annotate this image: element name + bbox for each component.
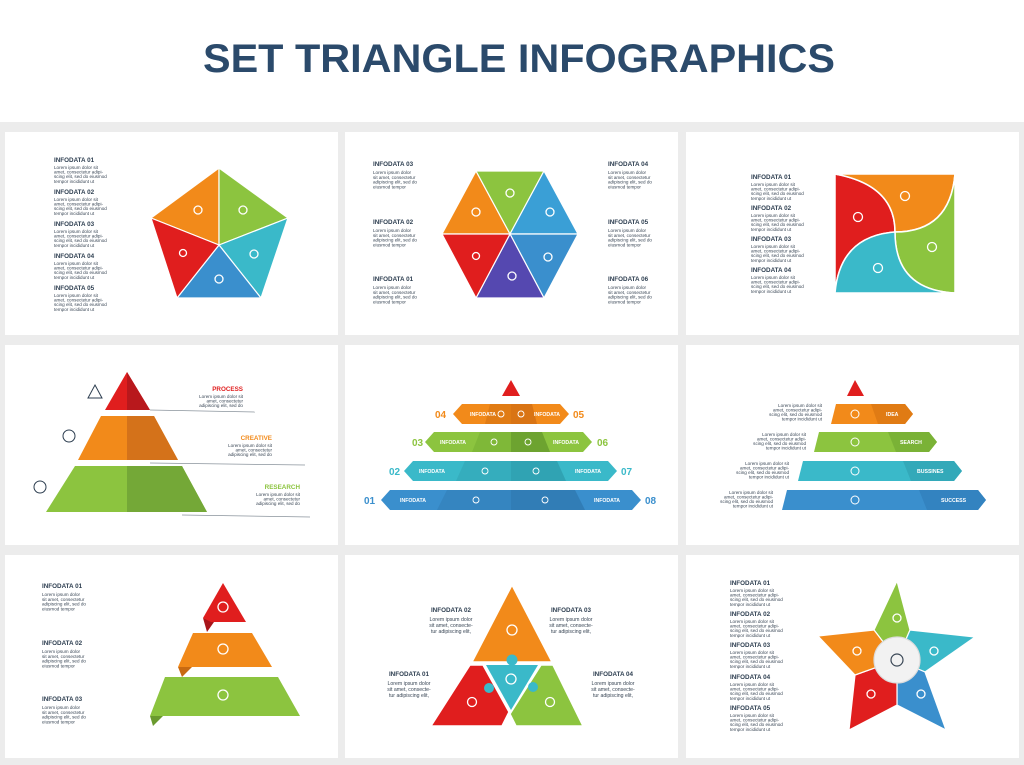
text list: hexagon: INFODATA 06 bbox=[608, 276, 649, 283]
step numbers: 03 bbox=[412, 438, 424, 449]
text list: star: scing elit, sed do eiusmod bbox=[730, 691, 783, 696]
title: SET TRIANGLE INFOGRAPHICS bbox=[203, 37, 835, 81]
text list: pentagon: Lorem ipsum dolor sit bbox=[54, 293, 98, 298]
text list: hexagon: eiusmod tempor bbox=[373, 184, 406, 189]
text list: pentagon: INFODATA 02 bbox=[54, 189, 95, 196]
hexagon chart bbox=[442, 171, 578, 298]
text list: ribbon bbox=[42, 583, 86, 724]
panel: 8-step bar pyramid bbox=[345, 345, 678, 545]
text list: star: INFODATA 02 bbox=[730, 611, 771, 618]
text list: ribbon: INFODATA 01 bbox=[42, 583, 83, 590]
labels: puzzle: INFODATA 02 bbox=[431, 607, 472, 614]
text list: star: INFODATA 04 bbox=[730, 674, 771, 681]
arrow bars bbox=[782, 404, 986, 510]
panel: star bbox=[686, 555, 1019, 758]
text list: star: tempor incididunt ut bbox=[730, 633, 771, 638]
text list: star: amet, consectetur adipi- bbox=[730, 687, 779, 692]
text list: pentagon: tempor incididunt ut bbox=[54, 275, 95, 280]
text list: star: tempor incididunt ut bbox=[730, 602, 771, 607]
step numbers: 04 bbox=[435, 410, 447, 421]
text list: ribbon: eiusmod tempor bbox=[42, 719, 75, 724]
panel: pentagon bbox=[5, 132, 338, 335]
labels: pyramid: RESEARCH bbox=[265, 484, 300, 491]
side text: Lorem ipsum dolor sit bbox=[729, 490, 773, 495]
text list: square: Lorem ipsum dolor sit bbox=[751, 275, 795, 280]
text list: pentagon: tempor incididunt ut bbox=[54, 211, 95, 216]
labels: puzzle: tur adipiscing elit, bbox=[431, 629, 471, 635]
text list: hexagon: Lorem ipsum dolor bbox=[373, 170, 411, 175]
text list: pentagon: scing elit, sed do eiusmod bbox=[54, 206, 107, 211]
text list: pentagon: tempor incididunt ut bbox=[54, 307, 95, 312]
text list: square: Lorem ipsum dolor sit bbox=[751, 213, 795, 218]
bars: INFODATA bbox=[575, 469, 601, 475]
text list: ribbon: Lorem ipsum dolor bbox=[42, 705, 80, 710]
panel: hexagon bbox=[345, 132, 678, 335]
text list: pentagon: scing elit, sed do eiusmod bbox=[54, 238, 107, 243]
text list: pentagon: scing elit, sed do eiusmod bbox=[54, 270, 107, 275]
labels: puzzle: sit amet, consecte- bbox=[591, 687, 635, 693]
labels: puzzle: INFODATA 03 bbox=[551, 607, 592, 614]
step numbers: 01 bbox=[364, 496, 376, 507]
labels: pyramid: adipiscing elit, sed do bbox=[228, 452, 272, 457]
bars bbox=[381, 404, 641, 510]
labels: pyramid: adipiscing elit, sed do bbox=[199, 403, 243, 408]
side text: Lorem ipsum dolor sit bbox=[762, 432, 806, 437]
labels: pyramid: CREATIVE bbox=[241, 435, 272, 442]
text list: pentagon: INFODATA 01 bbox=[54, 157, 95, 164]
text list: pentagon: scing elit, sed do eiusmod bbox=[54, 302, 107, 307]
bars: INFODATA bbox=[534, 412, 560, 418]
side text: amet, consectetur adipi- bbox=[740, 466, 789, 470]
text list: square: Lorem ipsum dolor sit bbox=[751, 182, 795, 187]
text list: pentagon: amet, consectetur adipi- bbox=[54, 298, 103, 303]
text list: square: amet, consectetur adipi- bbox=[751, 280, 800, 285]
text list: hexagon: eiusmod tempor bbox=[608, 242, 641, 247]
text list: hexagon: adipiscing elit, sed do bbox=[608, 238, 652, 243]
text list: hexagon: sit amet, consectetur bbox=[373, 175, 416, 180]
text list: star: scing elit, sed do eiusmod bbox=[730, 659, 783, 664]
side text: amet, consectetur adipi- bbox=[773, 408, 822, 412]
text list: star: Lorem ipsum dolor sit bbox=[730, 713, 774, 718]
text list: hexagon: Lorem ipsum dolor bbox=[608, 285, 646, 290]
text list: pentagon: Lorem ipsum dolor sit bbox=[54, 261, 98, 266]
text list: hexagon: eiusmod tempor bbox=[373, 242, 406, 247]
labels: puzzle: tur adipiscing elit, bbox=[593, 693, 633, 699]
text list: pentagon: Lorem ipsum dolor sit bbox=[54, 165, 98, 170]
text list: square: amet, consectetur adipi- bbox=[751, 249, 800, 254]
labels: puzzle: Lorem ipsum dolor bbox=[592, 681, 634, 687]
arrow bars: BUSSINES bbox=[917, 469, 944, 475]
text list: square: amet, consectetur adipi- bbox=[751, 218, 800, 223]
text list: ribbon: adipiscing elit, sed do bbox=[42, 715, 86, 720]
side text: tempor incididunt ut bbox=[766, 446, 807, 450]
text list: hexagon: INFODATA 05 bbox=[608, 219, 649, 226]
text list: star: amet, consectetur adipi- bbox=[730, 718, 779, 723]
text list: star: tempor incididunt ut bbox=[730, 727, 771, 732]
text list: pentagon: INFODATA 05 bbox=[54, 285, 95, 292]
step numbers: 02 bbox=[389, 467, 401, 478]
puzzle chart bbox=[431, 585, 583, 726]
text list: star: INFODATA 01 bbox=[730, 580, 771, 587]
text list: pentagon: amet, consectetur adipi- bbox=[54, 234, 103, 239]
labels: puzzle: Lorem ipsum dolor bbox=[550, 617, 592, 623]
bars: INFODATA bbox=[594, 498, 620, 504]
text list: star: amet, consectetur adipi- bbox=[730, 655, 779, 660]
labels: pyramid bbox=[199, 386, 301, 506]
text list: hexagon: eiusmod tempor bbox=[373, 299, 406, 304]
bars: INFODATA bbox=[440, 440, 466, 446]
text list: hexagon: INFODATA 01 bbox=[373, 276, 414, 283]
bars: INFODATA bbox=[553, 440, 579, 446]
text list: square: Lorem ipsum dolor sit bbox=[751, 244, 795, 249]
step numbers: 08 bbox=[645, 496, 657, 507]
panel: 3-tier pyramid bbox=[5, 345, 338, 545]
text list: star: scing elit, sed do eiusmod bbox=[730, 597, 783, 602]
text list: star: amet, consectetur adipi- bbox=[730, 624, 779, 629]
labels: pyramid: amet, consectetur bbox=[263, 497, 300, 502]
panel: arrow pyramid bbox=[686, 345, 1019, 545]
bars: INFODATA bbox=[419, 469, 445, 475]
text list: square: amet, consectetur adipi- bbox=[751, 187, 800, 192]
side text: tempor incididunt ut bbox=[733, 504, 774, 508]
labels: puzzle: Lorem ipsum dolor bbox=[388, 681, 430, 687]
step numbers: 07 bbox=[621, 467, 633, 478]
text list: star: scing elit, sed do eiusmod bbox=[730, 722, 783, 727]
text list: star: scing elit, sed do eiusmod bbox=[730, 628, 783, 633]
text list: hexagon: adipiscing elit, sed do bbox=[373, 238, 417, 243]
side text: Lorem ipsum dolor sit bbox=[745, 461, 789, 466]
labels: puzzle: sit amet, consecte- bbox=[549, 623, 593, 629]
side text: scing elit, sed do eiusmod bbox=[753, 441, 806, 446]
text list: star: INFODATA 03 bbox=[730, 642, 771, 649]
text list: hexagon: adipiscing elit, sed do bbox=[373, 295, 417, 300]
text list: hexagon: INFODATA 03 bbox=[373, 161, 414, 168]
text list: star: amet, consectetur adipi- bbox=[730, 593, 779, 598]
labels: pyramid: PROCESS bbox=[212, 386, 243, 393]
text list: ribbon: eiusmod tempor bbox=[42, 663, 75, 668]
text list: square: scing elit, sed do eiusmod bbox=[751, 284, 804, 289]
arrow bars: SEARCH bbox=[900, 440, 922, 446]
top triangle bbox=[502, 380, 520, 396]
text list: hexagon: INFODATA 04 bbox=[608, 161, 649, 168]
labels: puzzle: sit amet, consecte- bbox=[429, 623, 473, 629]
labels: puzzle: INFODATA 01 bbox=[389, 671, 430, 678]
labels: pyramid: Lorem ipsum dolor sit bbox=[256, 492, 300, 497]
labels: puzzle: tur adipiscing elit, bbox=[389, 693, 429, 699]
text list: square: INFODATA 01 bbox=[751, 174, 792, 181]
panel: puzzle triangle bbox=[345, 555, 678, 758]
text list: hexagon: sit amet, consectetur bbox=[608, 175, 651, 180]
text list: pentagon: Lorem ipsum dolor sit bbox=[54, 197, 98, 202]
text list: hexagon: Lorem ipsum dolor bbox=[608, 170, 646, 175]
side text bbox=[720, 403, 823, 508]
text list: pentagon: INFODATA 03 bbox=[54, 221, 95, 228]
connector lines bbox=[150, 410, 310, 517]
side text: Lorem ipsum dolor sit bbox=[778, 403, 822, 408]
text list: ribbon: adipiscing elit, sed do bbox=[42, 659, 86, 664]
text list: star bbox=[730, 580, 783, 732]
panel: pinwheel square bbox=[686, 132, 1019, 335]
text list: pentagon: tempor incididunt ut bbox=[54, 179, 95, 184]
text list: ribbon: INFODATA 03 bbox=[42, 696, 83, 703]
text list: square: tempor incididunt ut bbox=[751, 289, 792, 294]
text list: pentagon: scing elit, sed do eiusmod bbox=[54, 174, 107, 179]
step numbers: 06 bbox=[597, 438, 609, 449]
pinwheel chart bbox=[835, 174, 955, 293]
text list: star: INFODATA 05 bbox=[730, 705, 771, 712]
text list: ribbon: Lorem ipsum dolor bbox=[42, 592, 80, 597]
labels: puzzle: tur adipiscing elit, bbox=[551, 629, 591, 635]
text list: ribbon: sit amet, consectetur bbox=[42, 597, 85, 602]
step numbers bbox=[364, 410, 657, 507]
text list: pentagon: Lorem ipsum dolor sit bbox=[54, 229, 98, 234]
text list: hexagon bbox=[373, 161, 652, 304]
text list: square: INFODATA 04 bbox=[751, 267, 792, 274]
ribbon pyramid chart bbox=[150, 583, 300, 726]
bars: INFODATA bbox=[400, 498, 426, 504]
panel: ribbon pyramid bbox=[5, 555, 338, 758]
pentagon chart bbox=[151, 168, 288, 298]
labels: puzzle: sit amet, consecte- bbox=[387, 687, 431, 693]
text list: square: scing elit, sed do eiusmod bbox=[751, 222, 804, 227]
text list: hexagon: Lorem ipsum dolor bbox=[373, 228, 411, 233]
text list: hexagon: eiusmod tempor bbox=[608, 299, 641, 304]
text list: hexagon: INFODATA 02 bbox=[373, 219, 414, 226]
text list: ribbon: INFODATA 02 bbox=[42, 640, 83, 647]
text list: ribbon: Lorem ipsum dolor bbox=[42, 649, 80, 654]
text list: hexagon: sit amet, consectetur bbox=[373, 290, 416, 295]
labels: pyramid: amet, consectetur bbox=[235, 448, 272, 453]
labels: pyramid: Lorem ipsum dolor sit bbox=[199, 394, 243, 399]
text list: hexagon: eiusmod tempor bbox=[608, 184, 641, 189]
side text: scing elit, sed do eiusmod bbox=[769, 412, 822, 417]
text list: pentagon: INFODATA 04 bbox=[54, 253, 95, 260]
text list: square: INFODATA 03 bbox=[751, 236, 792, 243]
text list: ribbon: sit amet, consectetur bbox=[42, 654, 85, 659]
text list: hexagon: sit amet, consectetur bbox=[608, 290, 651, 295]
text list: star: Lorem ipsum dolor sit bbox=[730, 650, 774, 655]
top triangle bbox=[847, 380, 864, 396]
text list: hexagon: Lorem ipsum dolor bbox=[608, 228, 646, 233]
text list: square: tempor incididunt ut bbox=[751, 227, 792, 232]
text list: hexagon: sit amet, consectetur bbox=[373, 233, 416, 238]
side text: amet, consectetur adipi- bbox=[724, 494, 773, 500]
labels: puzzle bbox=[387, 607, 635, 699]
text list: pentagon: amet, consectetur adipi- bbox=[54, 266, 103, 271]
icons: pyramid left bbox=[34, 385, 102, 493]
text list: square: tempor incididunt ut bbox=[751, 196, 792, 201]
step numbers: 05 bbox=[573, 410, 585, 421]
text list: square bbox=[751, 174, 804, 294]
labels: pyramid: adipiscing elit, sed do bbox=[256, 501, 300, 506]
text list: ribbon: adipiscing elit, sed do bbox=[42, 602, 86, 607]
text list: hexagon: adipiscing elit, sed do bbox=[608, 295, 652, 300]
text list: pentagon: tempor incididunt ut bbox=[54, 243, 95, 248]
text list: star: Lorem ipsum dolor sit bbox=[730, 682, 774, 687]
labels: pyramid: amet, consectetur bbox=[206, 399, 243, 404]
text list: ribbon: eiusmod tempor bbox=[42, 606, 75, 611]
arrow bars: SUCCESS bbox=[941, 498, 967, 504]
text list: hexagon: Lorem ipsum dolor bbox=[373, 285, 411, 290]
labels: puzzle: INFODATA 04 bbox=[593, 671, 634, 678]
side text: tempor incididunt ut bbox=[749, 474, 790, 480]
bars: INFODATA bbox=[470, 412, 496, 418]
text list: square: tempor incididunt ut bbox=[751, 258, 792, 263]
text list: pentagon: amet, consectetur adipi- bbox=[54, 170, 103, 175]
text list: ribbon: sit amet, consectetur bbox=[42, 710, 85, 715]
text list: square: INFODATA 02 bbox=[751, 205, 792, 212]
text list: hexagon: adipiscing elit, sed do bbox=[373, 180, 417, 185]
text list: square: scing elit, sed do eiusmod bbox=[751, 191, 804, 196]
text list: hexagon: sit amet, consectetur bbox=[608, 233, 651, 238]
labels: puzzle: Lorem ipsum dolor bbox=[430, 617, 472, 623]
arrow bars: IDEA bbox=[886, 412, 899, 418]
side text: scing elit, sed do eiusmod bbox=[736, 470, 789, 475]
text list: star: tempor incididunt ut bbox=[730, 696, 771, 701]
text list: star: Lorem ipsum dolor sit bbox=[730, 588, 774, 593]
side text: tempor incididunt ut bbox=[782, 416, 823, 422]
text list: star: tempor incididunt ut bbox=[730, 664, 771, 669]
text list: pentagon: amet, consectetur adipi- bbox=[54, 202, 103, 207]
star chart bbox=[818, 581, 975, 730]
text list: hexagon: adipiscing elit, sed do bbox=[608, 180, 652, 185]
text list: square: scing elit, sed do eiusmod bbox=[751, 253, 804, 258]
labels: pyramid: Lorem ipsum dolor sit bbox=[228, 443, 272, 448]
text list: pentagon bbox=[54, 157, 107, 312]
side text: amet, consectetur adipi- bbox=[757, 436, 806, 442]
pyramid chart bbox=[46, 372, 207, 512]
text list: star: Lorem ipsum dolor sit bbox=[730, 619, 774, 624]
side text: scing elit, sed do eiusmod bbox=[720, 499, 773, 504]
